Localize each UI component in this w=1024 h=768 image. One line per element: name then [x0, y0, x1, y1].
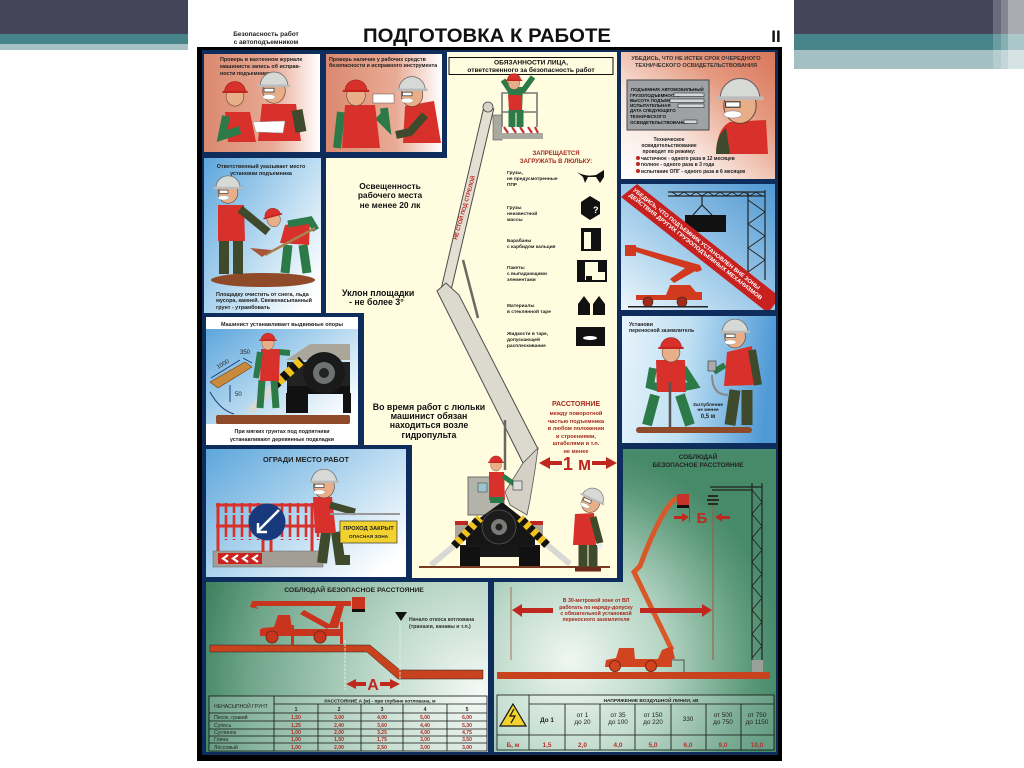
foreman portrait: [716, 78, 768, 154]
item: glass containers: Материалы: [507, 303, 534, 309]
bucket worker: [503, 74, 533, 127]
dimension Б: [674, 507, 730, 527]
voltage table: 4,0: [614, 742, 623, 749]
item: carbide drums: с карбидом кальция: [507, 243, 556, 250]
truck rear: [286, 344, 351, 413]
distance note: между поворотной: [550, 410, 603, 417]
panel heading: УБЕДИСЬ, ЧТО НЕ ИСТЕК СРОК ОЧЕРЕДНОГО: [631, 56, 761, 62]
voltage table: НАПРЯЖЕНИЕ ВОЗДУШНОЙ ЛИНИИ, кВ: [604, 696, 699, 704]
upper boom: [446, 107, 489, 290]
soil table: Супесь: [214, 723, 232, 729]
aerial lift: НЕ СТОЙ ПОД СТРЕЛОЙ: [451, 175, 477, 241]
panel: logbook check: [204, 54, 320, 152]
road sign: [248, 504, 286, 552]
voltage table: 330: [683, 716, 694, 723]
voltage table: До 1: [540, 717, 554, 724]
operator: [488, 456, 522, 503]
data plate: ВЫСОТА ПОДЪЕМА: [630, 98, 675, 103]
soil table: 2,00: [334, 730, 344, 736]
voltage table: 6,0: [684, 742, 693, 749]
item: loose packs: с выпадающими: [507, 272, 547, 277]
voltage table: от 500: [714, 712, 733, 719]
panel: safe distance from power line: [494, 449, 776, 752]
panel text: безопасности и исправного инструмента: [329, 62, 437, 69]
soil table: 4,00: [420, 730, 430, 736]
foreman with clamp: [708, 319, 758, 425]
panel heading: ТЕХНИЧЕСКОГО ОСВИДЕТЕЛЬСТВОВАНИЯ: [635, 63, 757, 69]
inspection bullets: частичное - одного раза в 12 месяцев: [641, 156, 735, 162]
distance note: штабелями и т.п.: [553, 440, 600, 447]
panel heading: СОБЛЮДАЙ БЕЗОПАСНОЕ РАССТОЯНИЕ: [284, 585, 424, 594]
soil table: 1,00: [291, 730, 301, 736]
soil table: 4,75: [462, 730, 472, 736]
data plate: ПОДЪЕМНИК АВТОМОБИЛЬНЫЙ: [631, 87, 704, 92]
slide background band left: [0, 0, 188, 50]
worker with rod: [647, 337, 694, 427]
item: unknown mass: неизвестной: [507, 210, 537, 217]
panel text: Машинист устанавливает выдвижные опоры: [221, 322, 343, 328]
panel text: устанавливают деревянные подкладки: [230, 437, 334, 443]
soil table: 4,40: [420, 723, 430, 729]
inspection note: проводят по режиму:: [643, 149, 696, 155]
depth note: Заглубление: [693, 401, 723, 408]
text: illumination: рабочего места: [358, 190, 423, 200]
soil table: 3,00: [334, 715, 344, 721]
data plate: [627, 80, 709, 130]
dashed zone lines: [511, 580, 713, 660]
distance note: частью подъемника: [548, 419, 605, 425]
voltage table: 9,0: [719, 742, 728, 749]
wooden pad: 50: [235, 392, 242, 398]
slope marker: [395, 612, 407, 621]
wooden pad: 350: [240, 350, 251, 356]
distance note: РАССТОЯНИЕ: [552, 401, 600, 408]
panel text: установки подъемника: [230, 171, 293, 177]
item: carbide drums: [507, 228, 601, 251]
distance note: [539, 401, 617, 474]
zone note: с обязательной установкой: [560, 610, 632, 617]
soil table: 3,50: [462, 737, 472, 743]
voltage table: от 35: [610, 712, 626, 719]
text: operator position: Во время работ с люльки: [373, 402, 485, 412]
item: unknown mass: Грузы: [507, 205, 522, 211]
distance note: в любом положении: [548, 425, 605, 432]
chevron sign: [218, 553, 262, 564]
section number: II: [771, 27, 781, 46]
voltage table: Б, м: [507, 742, 520, 749]
voltage table: 5,0: [649, 742, 658, 749]
ground: [211, 273, 315, 287]
inspection bullets: полное - одного раза в 3 года: [641, 162, 714, 168]
title: ПОДГОТОВКА К РАБОТЕ: [363, 26, 611, 47]
panel heading: ОГРАДИ МЕСТО РАБОТ: [263, 455, 349, 464]
data plate: ОСВИДЕТЕЛЬСТВОВАНИЯ: [630, 120, 689, 125]
soil table: 1: [295, 707, 298, 713]
ground line: [419, 566, 610, 568]
cabin: [468, 477, 504, 515]
heading: duties box: ответственного за безопасность работ: [467, 66, 595, 74]
data plate: ГРУЗОПОДЪЕМНОСТЬ: [630, 93, 680, 98]
item: loose packs: [507, 261, 606, 283]
data plate: ДАТА СЛЕДУЮЩЕГО: [630, 108, 676, 113]
warning plate: ОПАСНАЯ ЗОНА: [349, 534, 389, 540]
outrigger left: [431, 518, 480, 565]
panel text: Проверь в вахтенном журнале: [220, 57, 302, 63]
text: slope: Уклон площадки: [342, 288, 414, 298]
diagonal warning banner: УБЕДИСЬ, ЧТО ПОДЪЕМНИК УСТАНОВЛЕН ВНЕ ЗОНЫ: [631, 188, 761, 292]
ground: [636, 427, 752, 433]
truck with boom: [250, 597, 365, 645]
panel: safe distance from excavation: [206, 582, 488, 752]
ground: [497, 672, 770, 679]
panel heading: БЕЗОПАСНОЕ РАССТОЯНИЕ: [653, 462, 744, 469]
outrigger: [250, 360, 302, 412]
item: unknown mass: [507, 196, 600, 223]
item: liquids: расплескивание: [507, 344, 546, 349]
item: carbide drums: Барабаны: [507, 237, 531, 244]
soil table: Песок, гравий: [214, 714, 248, 721]
turret: [505, 448, 538, 515]
voltage table: от 750: [748, 712, 767, 719]
voltage table: до 750: [713, 719, 733, 726]
one metre dimension: 1 м: [563, 454, 591, 474]
soil table: 3,60: [377, 723, 387, 729]
crane load: [685, 215, 726, 232]
depth note: не менее: [697, 408, 719, 413]
foreman: [396, 77, 441, 143]
panel text: Ответственный указывает место: [217, 163, 306, 170]
soil table: 1,50: [291, 715, 301, 721]
soil table: 3,00: [462, 745, 472, 751]
small subtitle: с автоподъемником: [234, 39, 299, 46]
panel: portable earthing: [622, 316, 776, 443]
forbidden list: [506, 170, 606, 349]
voltage table: до 220: [643, 719, 663, 726]
panel text: Проверь наличие у рабочих средств: [329, 56, 427, 63]
soil table: НЕНАСЫПНОЙ ГРУНТ: [214, 702, 268, 710]
text: illumination: Освещенность: [359, 181, 421, 191]
dimension A: [346, 677, 400, 694]
item: unplanned loads: Грузы,: [507, 170, 523, 176]
panel text: мусора, камней. Свеженасыпанный: [216, 297, 312, 304]
zone note: переносного заземлителя: [562, 617, 630, 623]
ground profile: [210, 645, 483, 679]
text: operator position: находиться возле: [390, 420, 468, 430]
panel text: переносной заземлитель: [629, 327, 694, 334]
ground: [216, 415, 350, 424]
foreman: [253, 72, 301, 141]
data plate: ИСПЫТАТЕЛЬНАЯ: [630, 103, 670, 108]
soil table: 1,75: [377, 737, 387, 743]
small subtitle: Безопасность работ: [233, 30, 299, 38]
soil table: 4: [424, 707, 427, 713]
soil table: 6,00: [462, 715, 472, 721]
soil table: РАССТОЯНИЕ А (м) - при глубине котлована, м: [324, 698, 436, 704]
text: slope: - не более 3°: [349, 297, 404, 307]
forbidden loads heading: ЗАГРУЖАТЬ В ЛЮЛЬКУ:: [520, 159, 592, 165]
soil table: 5,00: [420, 715, 430, 721]
zone note: работать по наряду-допуску: [559, 604, 633, 611]
slope note: Начало откоса котлована: [409, 617, 474, 623]
panel text: ности подъемника: [220, 71, 271, 77]
forbidden loads heading: ЗАПРЕЩАЕТСЯ: [532, 151, 580, 157]
panel: yellow central area: [326, 52, 617, 578]
item: loose packs: Пакеты: [507, 265, 525, 271]
mini lift: [625, 245, 708, 308]
text: operator position: гидропульта: [402, 430, 457, 440]
slide background band right: [794, 0, 1024, 69]
soil table: 3,25: [377, 730, 387, 736]
distance note: не менее: [564, 449, 588, 455]
item: unknown mass: ?: [593, 205, 598, 215]
heading: duties box: [449, 58, 613, 74]
item: unplanned loads: ППР: [507, 182, 518, 188]
soil table: 3,00: [420, 737, 430, 743]
soil table: 2,50: [377, 745, 387, 751]
lower boom: [437, 283, 538, 463]
foreman: [214, 176, 268, 274]
soil table: Суглинок: [214, 730, 237, 736]
soil table: 1,50: [334, 737, 344, 743]
voltage table: 10,0: [751, 742, 764, 749]
wooden pad: 1000: [216, 359, 231, 371]
worker: [222, 81, 256, 142]
panel: installation site: [204, 158, 321, 313]
warning icon: [500, 704, 526, 726]
voltage table: до 20: [574, 719, 591, 726]
poster frame: [197, 47, 782, 761]
soil table: 2,40: [334, 723, 344, 729]
zone note: В 30-метровой зоне от ВЛ: [563, 597, 630, 604]
pylon: [710, 483, 763, 672]
voltage table: 1,5: [543, 742, 552, 749]
soil table: 4,00: [377, 715, 387, 721]
soil table: 2: [338, 707, 341, 713]
panel: fence the work area: [206, 449, 406, 577]
item: unplanned loads: [507, 170, 604, 188]
item: glass containers: [507, 296, 605, 315]
item: liquids: [506, 327, 605, 349]
zone arrows: [512, 604, 712, 617]
operator: [256, 333, 290, 408]
concrete base: [213, 551, 323, 567]
item: liquids: допускающей: [507, 336, 540, 343]
voltage table: до 100: [608, 719, 628, 726]
insulator and wire: [707, 496, 719, 660]
panel text: грунт - утрамбовать: [216, 304, 271, 311]
text: operator position: машинист обязан: [391, 411, 467, 421]
soil table: 1,00: [291, 745, 301, 751]
slope note: (траншеи, канавы и т.п.): [409, 624, 471, 630]
inspection note: освидетельствование: [641, 143, 697, 149]
boom to bucket: [634, 494, 689, 650]
diagonal warning banner: [621, 184, 780, 313]
soil table: [209, 696, 487, 751]
soil table: 3: [381, 707, 384, 713]
item: liquids: Жидкости в таре,: [506, 331, 549, 337]
panel: safety equipment check: [326, 54, 442, 152]
data plate: ТЕХНИЧЕСКОГО: [630, 114, 667, 119]
bucket: [495, 93, 543, 139]
panel text: машиниста запись об исправ-: [220, 63, 301, 70]
soil table: Лёссовый: [214, 744, 238, 751]
dimension A: А: [367, 677, 379, 694]
panel text: При мягких грунтах под подпятники: [235, 429, 329, 435]
inspection bullets: испытание ОПГ - одного раза в 6 месяцев: [641, 169, 745, 175]
inspection note: Техническое: [653, 137, 685, 143]
foreman with barrier: [309, 469, 400, 563]
worker with shovel: [250, 206, 316, 273]
dashed lines: [345, 616, 400, 690]
boom head: [493, 115, 502, 140]
aerial lift: [419, 74, 610, 568]
soil table: 5,30: [462, 723, 472, 729]
soil table: Глина: [214, 737, 228, 743]
depth note: 0,5 м: [701, 414, 716, 420]
soil table: 3,00: [420, 745, 430, 751]
voltage table: до 1150: [746, 719, 769, 726]
standing foreman: [573, 484, 609, 572]
dimension Б: Б: [697, 510, 708, 527]
soil table: 2,00: [334, 745, 344, 751]
warning plate: ПРОХОД ЗАКРЫТ: [343, 526, 394, 532]
voltage table: [497, 695, 774, 750]
soil table: 1,00: [291, 737, 301, 743]
item: unknown mass: массы: [507, 218, 523, 223]
truck: [605, 646, 684, 672]
diagonal warning banner: ДЕЙСТВИЯ ДРУГИХ ГРУЗОПОДЪЕМНЫХ МЕХАНИЗМОВ: [627, 191, 764, 302]
item: unplanned loads: не предусмотренные: [507, 177, 558, 182]
voltage table: от 150: [644, 712, 663, 719]
worker: [337, 80, 394, 148]
poster sheet: [188, 0, 794, 768]
text: illumination: не менее 20 лк: [360, 200, 421, 210]
wooden pad: [210, 350, 252, 414]
panel: inspection date: [621, 52, 775, 179]
fence: [216, 503, 330, 552]
item: loose packs: элементами: [507, 278, 536, 283]
voltage table: 2,0: [578, 742, 587, 749]
heading: duties box: ОБЯЗАННОСТИ ЛИЦА,: [494, 60, 568, 66]
panel text: Установи: [629, 322, 653, 328]
voltage table: от 1: [577, 712, 589, 719]
soil table: 5: [466, 707, 469, 713]
warning plate: [340, 521, 397, 543]
item: glass containers: в стеклянной таре: [507, 308, 551, 315]
panel text: Площадку очистить от снега, льда: [216, 292, 310, 298]
panel heading: СОБЛЮДАЙ: [679, 452, 718, 461]
soil table: 1,25: [291, 723, 301, 729]
panel: other cranes: [621, 184, 780, 313]
distance note: и строениями,: [556, 434, 596, 440]
chassis: [455, 502, 543, 566]
inspection bullets: [636, 156, 745, 175]
panel: outriggers: [206, 317, 358, 445]
outrigger right: [520, 518, 570, 564]
crane: [668, 190, 765, 280]
